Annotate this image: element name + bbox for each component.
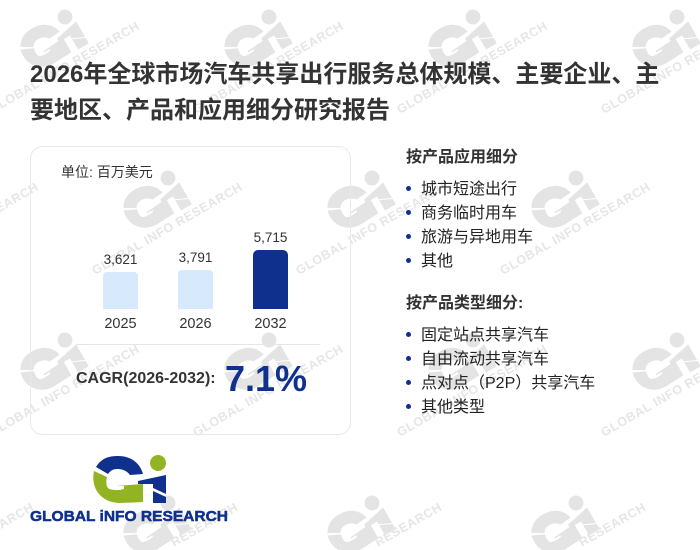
list: application: 城市短途出行 bbox=[421, 180, 517, 198]
CAGR value: 7.1% bbox=[225, 358, 307, 399]
heading: application: 按产品应用细分 bbox=[406, 147, 518, 166]
bar 2032: 2032 bbox=[254, 316, 287, 332]
panel: segmentation by application bbox=[406, 147, 533, 270]
bar 2026: 3,791 bbox=[179, 250, 212, 265]
watermark pattern: GLOBAL INFO RESEARCH bbox=[498, 180, 653, 278]
watermark pattern: GLOBAL INFO RESEARCH bbox=[90, 180, 245, 278]
unit label: 单位: 百万美元 bbox=[61, 164, 153, 180]
watermark pattern: GLOBAL INFO RESEARCH bbox=[190, 342, 346, 440]
list: application: 其他 bbox=[421, 252, 453, 270]
logo: Global Info Research bbox=[30, 455, 228, 525]
bar 2025: 3,621 bbox=[104, 252, 137, 267]
title bbox=[30, 61, 659, 124]
panel: market size card bbox=[30, 146, 350, 434]
bar 2032 bbox=[253, 230, 288, 332]
heading: type: 按产品类型细分: bbox=[406, 293, 523, 312]
watermark pattern: GLOBAL INFO RESEARCH bbox=[190, 19, 346, 117]
watermark pattern: GLOBAL INFO RESEARCH bbox=[394, 342, 550, 440]
list: type: 点对点（P2P）共享汽车 bbox=[421, 374, 595, 392]
bar chart bbox=[103, 230, 288, 332]
list: type: 固定站点共享汽车 bbox=[421, 326, 549, 344]
list: type: 其他类型 bbox=[421, 398, 485, 416]
CAGR label: CAGR(2026-2032): bbox=[76, 370, 216, 387]
title: 2026年全球市场汽车共享出行服务总体规模、主要企业、主 bbox=[30, 61, 659, 88]
list: type: 自由流动共享汽车 bbox=[421, 350, 549, 368]
watermark pattern: GLOBAL INFO RESEARCH bbox=[294, 180, 449, 278]
bar 2025: 2025 bbox=[104, 316, 137, 332]
title: 要地区、产品和应用细分研究报告 bbox=[30, 97, 390, 124]
list: type bbox=[406, 326, 595, 416]
list: application: 商务临时用车 bbox=[421, 204, 517, 222]
list: application bbox=[406, 180, 533, 270]
list: application: 旅游与异地用车 bbox=[421, 228, 533, 246]
watermark pattern: GLOBAL INFO RESEARCH bbox=[394, 19, 550, 117]
watermark pattern: RESEARCH bbox=[168, 500, 240, 550]
bar 2026 bbox=[178, 250, 213, 332]
panel: segmentation by type bbox=[406, 293, 595, 416]
bar 2032: 5,715 bbox=[254, 230, 287, 245]
watermark pattern: RESEARCH bbox=[372, 500, 444, 550]
bar 2025 bbox=[103, 252, 138, 332]
watermark pattern: RESEARCH bbox=[576, 500, 648, 550]
bar 2026: 2026 bbox=[179, 316, 212, 332]
logo: Global Info Research: GLOBAL iNFO RESEARCH bbox=[30, 508, 228, 525]
